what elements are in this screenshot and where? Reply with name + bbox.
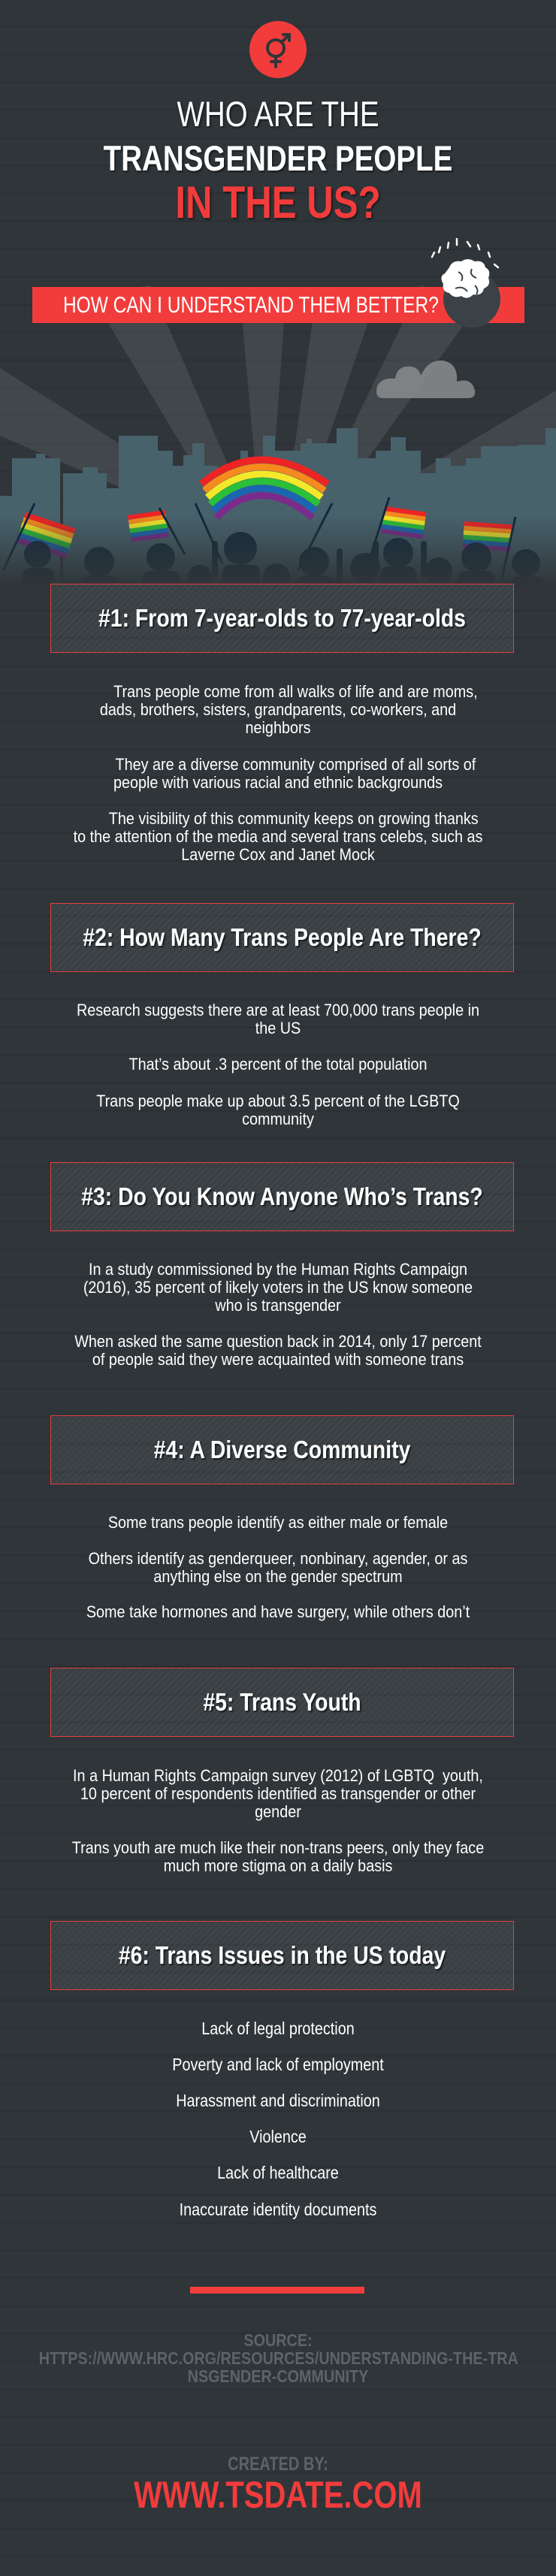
source	[39, 2330, 518, 2386]
panel: #6 heading	[50, 1921, 514, 1990]
text block: section 1: to the attention of the media and several trans celebs, such as	[74, 827, 482, 846]
text block: section 4: anything else on the gender spectrum Some take hormones and have surgery, while others don’t	[86, 1567, 470, 1621]
icon: brain	[431, 237, 500, 328]
text block: section 1: dads, brothers, sisters, grandparents, co-workers, and	[100, 700, 456, 719]
text block: section 3: (2016), 35 percent of likely voters in the US know someone	[83, 1278, 473, 1297]
text block: section 1: people with various racial and ethnic backgrounds	[113, 773, 443, 792]
cloud	[376, 361, 475, 398]
icon: transgender symbol	[249, 21, 307, 78]
text block: section 1: Laverne Cox and Janet Mock	[181, 845, 375, 864]
list: trans issues: Violence	[249, 2127, 307, 2146]
panel: #5 heading: #5: Trans Youth	[203, 1688, 361, 1716]
skyline with crowd and rainbow flags	[0, 428, 556, 574]
rainbow arc	[201, 460, 328, 518]
title	[104, 94, 453, 228]
text block: section 4	[86, 1513, 470, 1621]
text block: section 5: gender Trans youth are much like their non-trans peers, only they face	[72, 1802, 484, 1857]
light beams background	[0, 285, 556, 487]
title: TRANSGENDER PEOPLE	[104, 138, 452, 178]
panel: #1 heading	[50, 584, 514, 653]
text block: section 3: who is transgender When asked the same question back in 2014, only 17 percent	[74, 1296, 482, 1351]
red divider	[190, 2287, 364, 2294]
flags	[16, 506, 512, 559]
list: trans issues: Lack of healthcare	[217, 2163, 339, 2182]
panel: #3 heading: #3: Do You Know Anyone Who’s Trans?	[81, 1182, 483, 1210]
text block: section 1: neighbors	[246, 718, 310, 737]
crowd	[23, 532, 544, 590]
panel: #2 heading: #2: How Many Trans People Are There?	[83, 923, 482, 951]
panel: #4 heading	[50, 1415, 514, 1484]
panel: #3 heading	[50, 1162, 514, 1231]
source: NSGENDER-COMMUNITY	[188, 2366, 368, 2386]
text block: section 4: Some trans people identify as either male or female Others identify as genderqueer, nonbinary, agender, or as	[89, 1513, 467, 1568]
credit: CREATED BY:	[228, 2454, 328, 2475]
panel: #5 heading	[50, 1668, 514, 1737]
title: WHO ARE THE	[177, 94, 379, 134]
title: IN THE US?	[175, 177, 381, 228]
text block: section 1: They are a diverse community comprised of all sorts of	[116, 755, 476, 774]
text block: section 3: In a study commissioned by the Human Rights Campaign	[89, 1260, 467, 1279]
source: HTTPS://WWW.HRC.ORG/RESOURCES/UNDERSTANDING-THE-TRA	[39, 2348, 518, 2368]
list: trans issues	[172, 2019, 384, 2219]
text block: section 2	[77, 1001, 479, 1128]
text block: section 5	[72, 1766, 484, 1875]
text block: section 3: of people said they were acquainted with someone trans	[92, 1350, 464, 1369]
panel: #2 heading	[50, 903, 514, 972]
subtitle bar: HOW CAN I UNDERSTAND THEM BETTER?	[63, 291, 439, 318]
panel: #1 heading: #1: From 7-year-olds to 77-year-olds	[98, 604, 466, 632]
text block: section 1: The visibility of this community keeps on growing thanks	[109, 809, 479, 828]
text block: section 1: Trans people come from all walks of life and are moms,	[113, 682, 478, 701]
text block: section 2: community	[242, 1110, 314, 1128]
list: trans issues: Inaccurate identity documents	[180, 2200, 376, 2219]
text block: section 3	[74, 1260, 482, 1369]
list: trans issues: Poverty and lack of employment	[172, 2055, 384, 2074]
text block: section 1	[74, 682, 482, 864]
list: trans issues: Lack of legal protection	[201, 2019, 355, 2038]
panel: #4 heading: #4: A Diverse Community	[154, 1436, 410, 1463]
credit	[134, 2454, 422, 2516]
text block: section 5: much more stigma on a daily basis	[164, 1856, 392, 1875]
list: trans issues: Harassment and discrimination	[176, 2091, 380, 2110]
source: SOURCE:	[243, 2330, 313, 2350]
text block: section 5: In a Human Rights Campaign survey (2012) of LGBTQ youth,	[73, 1766, 483, 1785]
credit: WWW.TSDATE.COM	[134, 2474, 422, 2516]
text block: section 2: the US That’s about .3 percent of the total population Trans people make up about 3.5 percent of the LGBTQ	[96, 1019, 460, 1110]
panel: #6 heading: #6: Trans Issues in the US today	[119, 1941, 446, 1969]
text block: section 2: Research suggests there are at least 700,000 trans people in	[77, 1001, 479, 1019]
text block: section 5: 10 percent of respondents identified as transgender or other	[80, 1784, 476, 1803]
subtitle bar	[32, 287, 524, 323]
